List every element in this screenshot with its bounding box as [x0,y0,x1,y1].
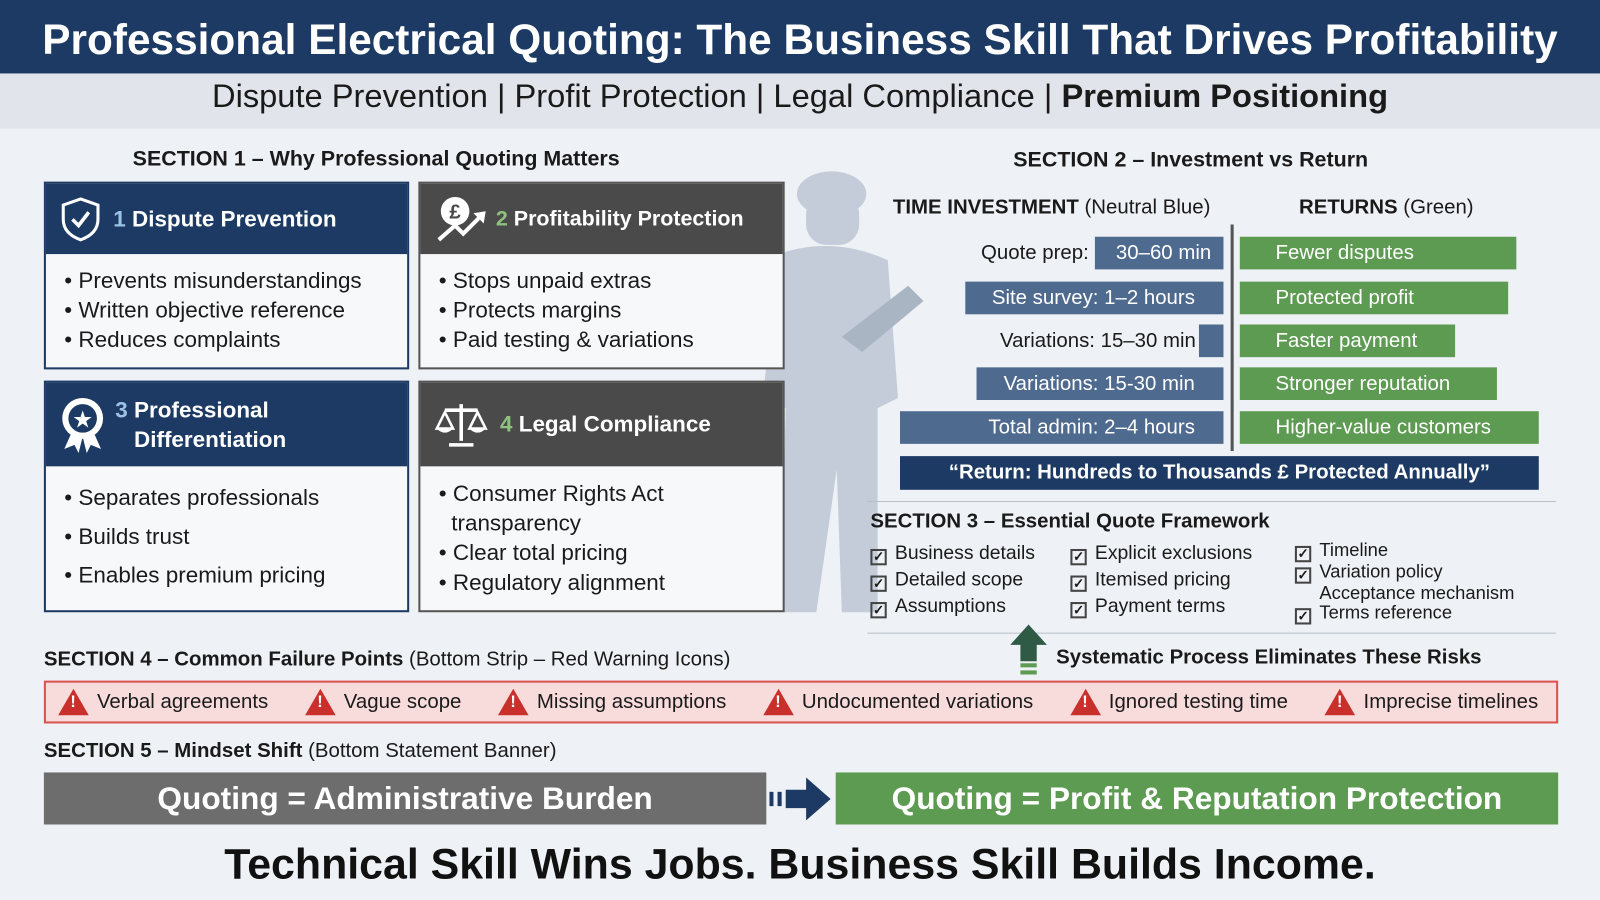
returns chart: RETURNS (Green) [1299,196,1474,218]
panel 4 legal compliance: Consumer Rights Act [453,481,664,506]
subtitle band: Dispute Prevention | Profit Protection | Legal Compliance | Premium Positioning [212,78,1388,114]
checklist: Variation policy [1319,561,1443,582]
panel 3 professional differentiation: ★ [74,410,92,432]
panel 2 profitability protection: Paid testing & variations [453,327,694,352]
returns chart: Stronger reputation [1276,372,1450,395]
section 4 heading: SECTION 4 – Common Failure Points (Bottom Strip – Red Warning Icons) [44,648,730,670]
checklist: ✓ [873,576,884,591]
panel 2 profitability protection: Protects margins [453,297,621,322]
section 3 heading: SECTION 3 – Essential Quote Framework [870,510,1270,533]
checklist: Detailed scope [895,569,1023,591]
time investment chart [893,196,1224,444]
panel 4 legal compliance: Regulatory alignment [453,569,665,595]
subtitle band [0,73,1600,129]
banner new mindset: Quoting = Profit & Reputation Protection [892,781,1502,816]
returns chart: Protected profit [1276,287,1414,309]
returns chart: Fewer disputes [1276,242,1414,264]
failure strip [44,681,1558,723]
section 5 heading: SECTION 5 – Mindset Shift (Bottom Statement Banner) [44,740,557,762]
return callout: “Return: Hundreds to Thousands £ Protected Annually” [949,461,1490,484]
failure strip: Verbal agreements [97,690,268,713]
section 1 heading: SECTION 1 – Why Professional Quoting Matters [133,147,620,170]
panel 3 professional differentiation: Separates professionals [78,485,319,510]
panel 3 professional differentiation: 3 Professional [115,397,269,422]
time investment chart: Variations: 15-30 min [1004,372,1195,395]
time investment chart: Total admin: 2–4 hours [988,416,1195,439]
panel 2 profitability protection: 2 Profitability Protection [496,207,744,230]
systematic process text: Systematic Process Eliminates These Risks [1056,646,1482,668]
time investment chart: Quote prep: [981,242,1089,264]
checklist: Business details [895,543,1035,564]
checklist: Acceptance mechanism [1319,583,1514,603]
checklist: Payment terms [1095,596,1225,617]
checklist: ✓ [873,549,884,564]
arrow right [769,778,830,820]
failure strip: Missing assumptions [537,690,726,713]
panel 3 professional differentiation: Enables premium pricing [78,562,325,588]
panel 1 dispute prevention [44,182,409,369]
return callout [900,456,1539,490]
checklist: ✓ [1073,576,1084,591]
panel 4 legal compliance: Clear total pricing [453,540,628,565]
section 2 heading: SECTION 2 – Investment vs Return [1013,148,1368,171]
panel 3 professional differentiation: Builds trust [78,523,189,549]
time investment chart: 30–60 min [1116,242,1211,264]
panel 3 professional differentiation [44,381,409,612]
panel 4 legal compliance: 4 Legal Compliance [500,411,711,437]
title bar [0,0,1600,73]
checklist: Timeline [1319,540,1388,560]
checklist: ✓ [873,602,884,617]
checklist: ✓ [1073,602,1084,617]
checklist: Explicit exclusions [1095,543,1252,564]
title bar: Professional Electrical Quoting: The Business Skill That Drives Profitability [42,15,1558,63]
panel 1 dispute prevention: Reduces complaints [78,327,281,352]
failure strip: Imprecise timelines [1364,690,1538,713]
panel 4 legal compliance [418,381,785,612]
panel 2 profitability protection: Stops unpaid extras [453,267,651,293]
time investment chart: Site survey: 1–2 hours [992,287,1195,309]
time investment chart: TIME INVESTMENT (Neutral Blue) [893,196,1210,218]
panel 4 legal compliance: transparency [451,510,581,536]
panel 2 profitability protection [418,182,785,369]
banner new mindset [836,772,1558,824]
banner old mindset [44,772,766,824]
checklist: Assumptions [895,596,1006,617]
panel 3 professional differentiation: Differentiation [134,427,286,452]
checklist: ✓ [1297,546,1309,561]
divider [1231,224,1234,451]
checklist [870,540,1514,624]
panel 1 dispute prevention: Prevents misunderstandings [78,267,362,293]
failure strip: Vague scope [344,690,461,713]
panel 1 dispute prevention: Written objective reference [78,297,345,322]
arrow up [1010,624,1047,674]
checklist: ✓ [1297,567,1309,583]
checklist: ✓ [1073,549,1084,564]
closing statement: Technical Skill Wins Jobs. Business Skill Builds Income. [224,840,1376,888]
returns chart: Faster payment [1276,330,1417,352]
returns chart [1240,196,1539,444]
banner old mindset: Quoting = Administrative Burden [157,781,653,816]
panel 2 profitability protection: £ [449,201,461,223]
failure strip: Ignored testing time [1109,690,1288,713]
worker silhouette [764,171,924,612]
checklist: Terms reference [1319,602,1452,622]
time investment chart: Variations: 15–30 min [1000,330,1196,352]
checklist: ✓ [1297,608,1309,623]
checklist: Itemised pricing [1095,569,1231,591]
failure strip: Undocumented variations [802,690,1033,713]
returns chart: Higher-value customers [1276,416,1491,439]
panel 1 dispute prevention: 1 Dispute Prevention [113,206,337,231]
